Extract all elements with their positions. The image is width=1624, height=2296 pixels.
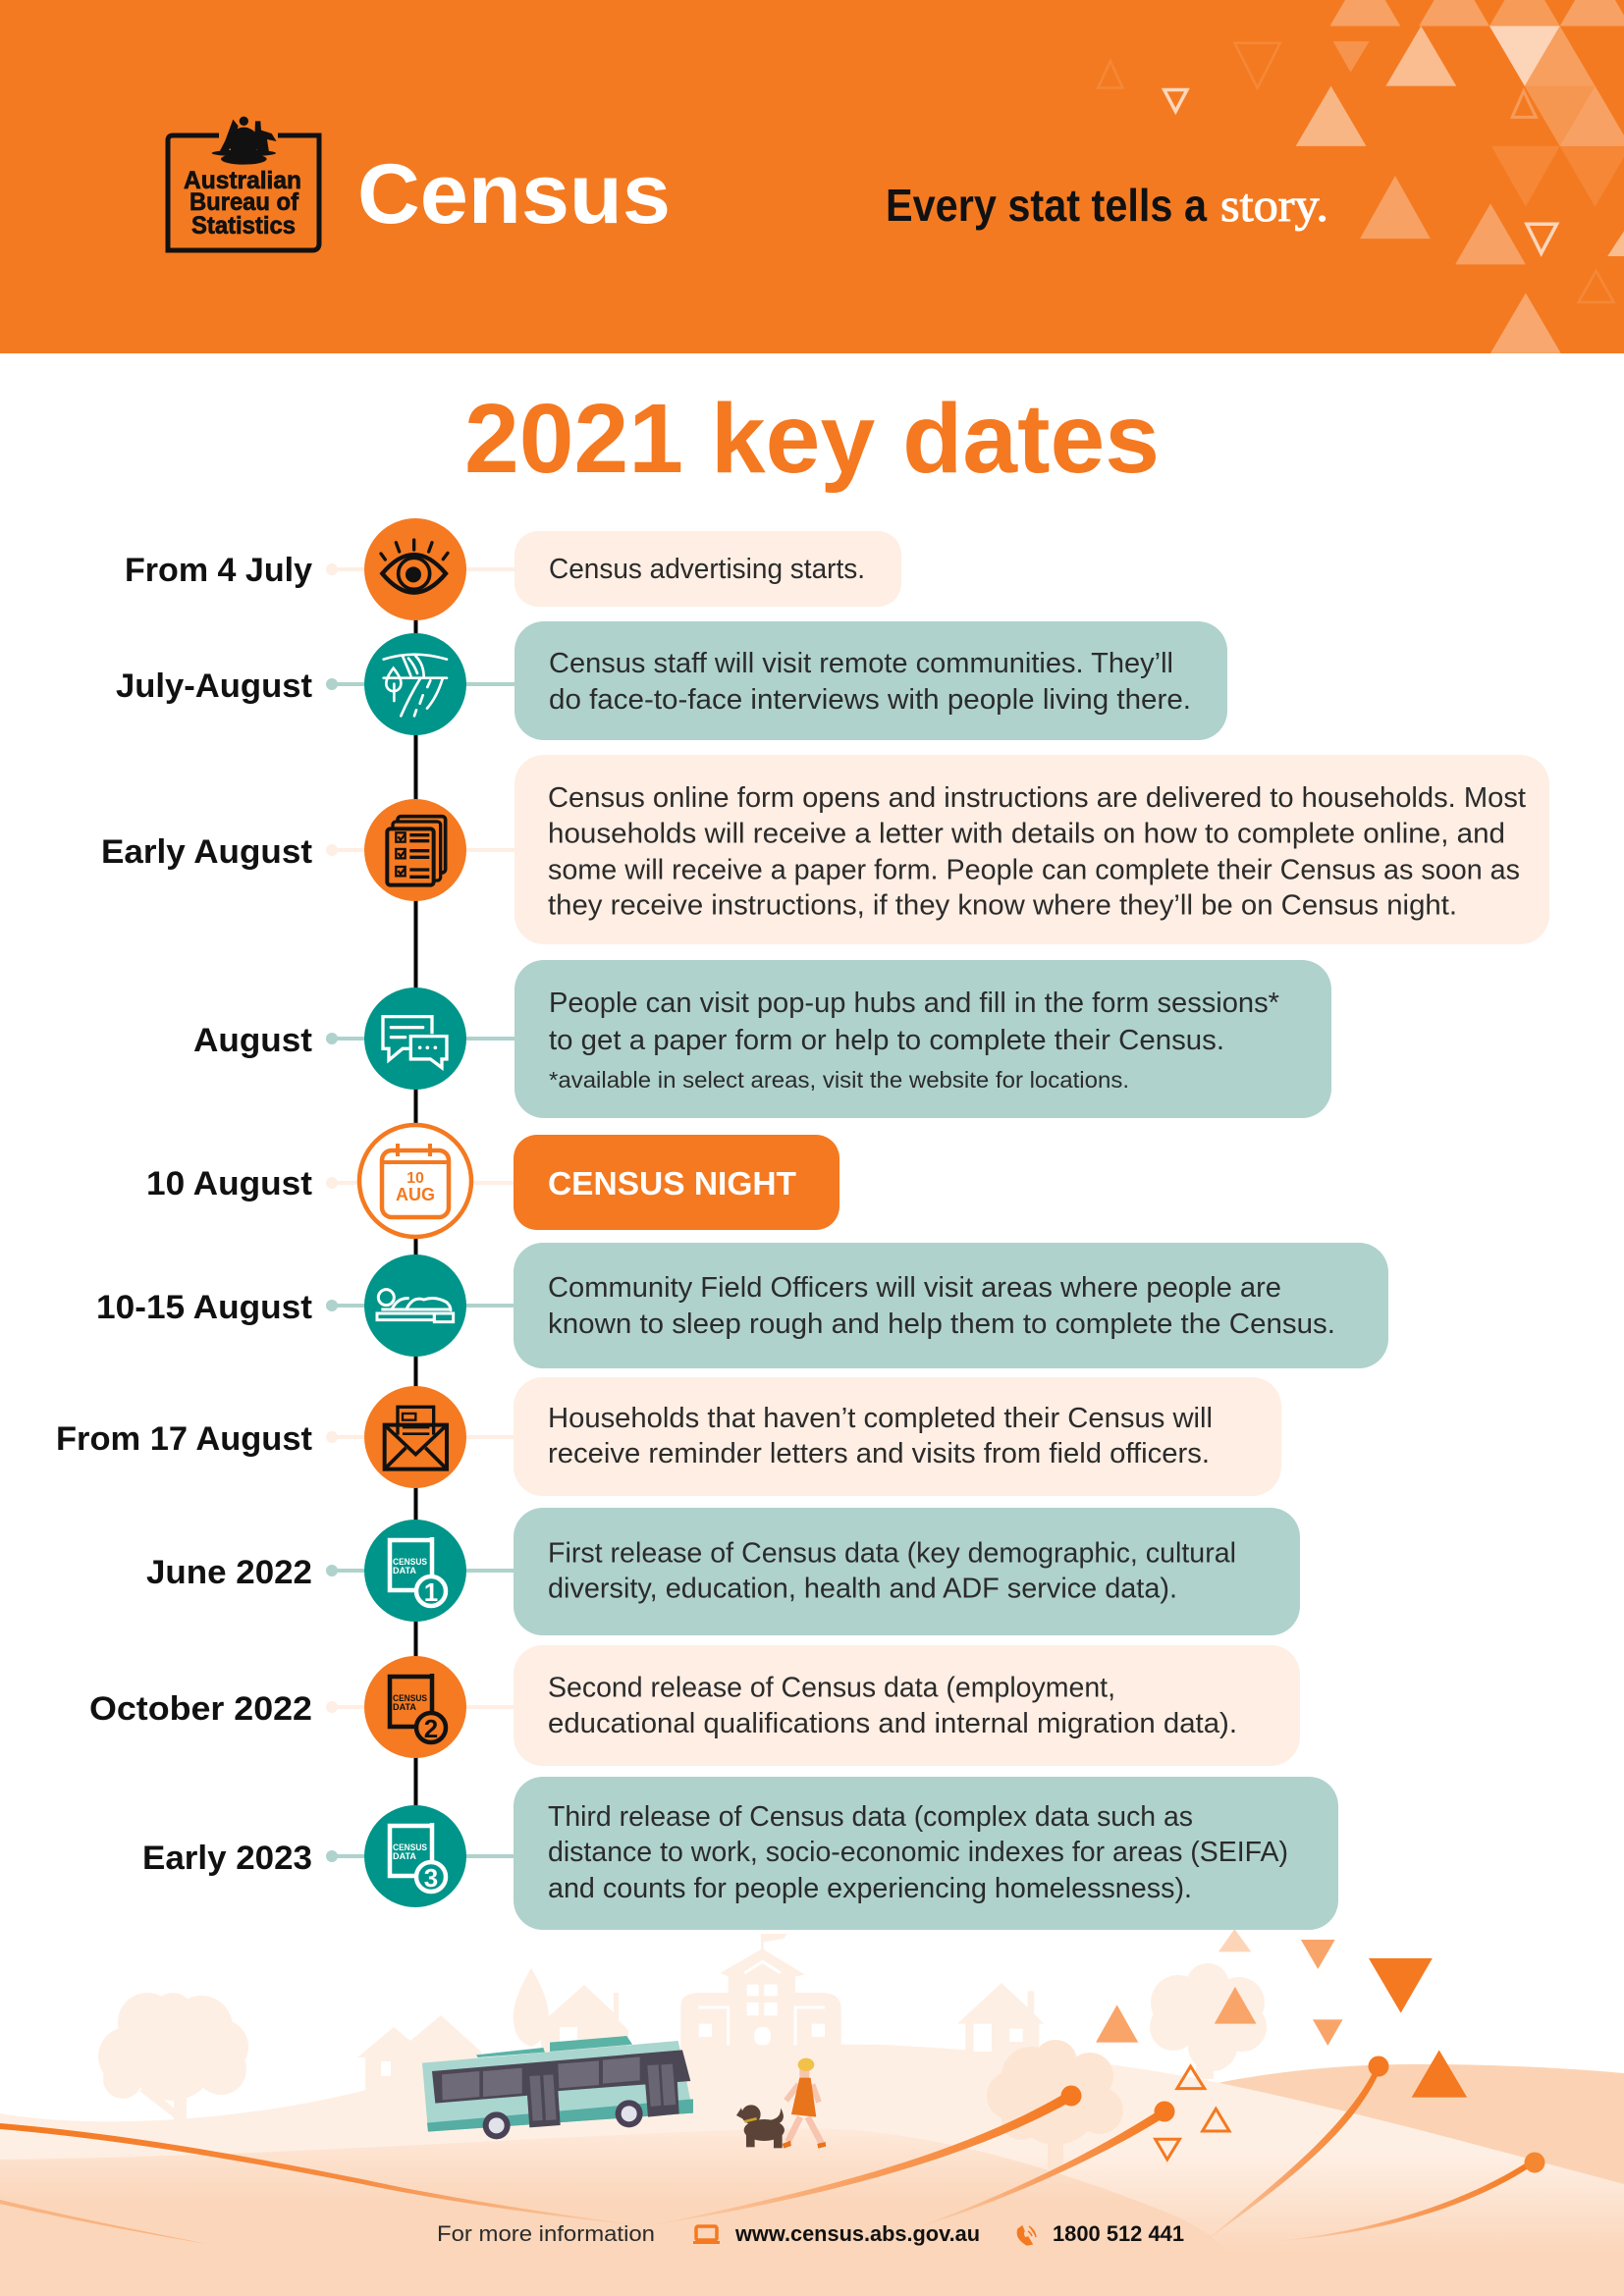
- date: 10-15 August: [96, 1289, 312, 1326]
- date: Early August: [101, 833, 312, 871]
- text bubble: [514, 1243, 1388, 1368]
- school: [680, 1934, 841, 2055]
- ABS logo: [168, 117, 319, 250]
- timeline row: From 17 August: [56, 1377, 1281, 1496]
- timeline row: July-August: [116, 621, 1227, 740]
- ABS logo: Bureau of: [189, 188, 299, 216]
- date: October 2022: [89, 1690, 312, 1728]
- text bubble: receive reminder letters and visits from field officers.: [548, 1438, 1210, 1469]
- footer triangles: [1096, 1929, 1467, 2160]
- curve to node 4: [1278, 2152, 1545, 2241]
- text bubble: they receive instructions, if they know where they’ll be on Census night.: [548, 889, 1457, 921]
- house right: [957, 1983, 1044, 2055]
- curve to node 2: [915, 2101, 1174, 2228]
- text bubble: People can visit pop-up hubs and fill in the form sessions*: [549, 988, 1279, 1019]
- icon: laptop: [693, 2226, 720, 2244]
- text bubble: Census staff will visit remote communities. They’ll: [549, 648, 1173, 679]
- footer landscape: [0, 1929, 1624, 2296]
- icon: census data 3: [364, 1805, 466, 1907]
- ABS logo: Australian: [184, 167, 301, 194]
- Census wordmark: Census: [357, 147, 671, 241]
- icon: census data 1: [364, 1520, 466, 1622]
- girl: [783, 2058, 826, 2149]
- text bubble: and counts for people experiencing homelessness).: [548, 1873, 1192, 1904]
- text bubble: [514, 1377, 1281, 1496]
- text bubble: educational qualifications and internal migration data).: [548, 1708, 1237, 1739]
- title: 2021 key dates: [464, 384, 1160, 494]
- date: From 17 August: [56, 1420, 312, 1458]
- timeline row: October 2022: [89, 1645, 1300, 1766]
- icon: census data 2: CENSUS: [393, 1693, 427, 1704]
- icon: eye: [364, 518, 466, 620]
- far hill: [0, 2045, 1624, 2296]
- text bubble: [514, 1645, 1300, 1766]
- text bubble: Community Field Officers will visit areas where people are: [548, 1272, 1281, 1304]
- text bubble: Census online form opens and instructions are delivered to households. Most: [548, 782, 1526, 814]
- date: August: [193, 1022, 312, 1059]
- tree right: [1150, 1963, 1267, 2079]
- icon: census data 2: DATA: [393, 1702, 416, 1713]
- timeline row: Early 2023: [142, 1777, 1338, 1930]
- date: From 4 July: [125, 552, 312, 589]
- date: Early 2023: [142, 1840, 312, 1877]
- bus: [422, 2036, 693, 2139]
- header triangle pattern: [1098, 0, 1624, 353]
- houses left: [357, 2015, 481, 2101]
- ABS logo: Statistics: [191, 212, 296, 240]
- date: June 2022: [146, 1554, 312, 1591]
- census night bubble: [514, 1135, 839, 1230]
- dog: [736, 2105, 785, 2148]
- mid hill: [0, 2128, 1267, 2296]
- timeline row: August: [193, 960, 1331, 1118]
- curve to node 3: [1206, 2056, 1388, 2241]
- text bubble: some will receive a paper form. People can complete their Census as soon as: [548, 854, 1520, 885]
- footer contact line: For more information: [437, 2221, 655, 2246]
- coat of arms: [212, 117, 277, 165]
- tagline: story.: [1220, 180, 1328, 232]
- curve to node 1: [647, 2085, 1082, 2226]
- tree centre: [987, 2040, 1123, 2171]
- footer contact line: 1800 512 441: [1053, 2221, 1184, 2246]
- timeline row: From 4 July: [125, 518, 901, 620]
- icon: census data 1: CENSUS: [393, 1557, 427, 1568]
- icon: census data 2: 2: [424, 1714, 438, 1743]
- icon: phone: [1017, 2226, 1036, 2245]
- census night bubble: CENSUS NIGHT: [548, 1165, 796, 1201]
- tagline: Every stat tells a: [886, 180, 1207, 231]
- icon: census data 3: CENSUS: [393, 1842, 427, 1853]
- date: 10 August: [146, 1165, 312, 1202]
- text bubble: [514, 755, 1549, 944]
- text bubble: distance to work, socio-economic indexes for areas (SEIFA): [548, 1837, 1288, 1868]
- timeline spine: [414, 609, 418, 1816]
- timeline row: 10 August: [146, 1125, 839, 1237]
- timeline row: Early August: [101, 755, 1549, 944]
- text bubble: do face-to-face interviews with people living there.: [549, 684, 1191, 716]
- icon: road: [364, 633, 466, 735]
- icon: census data 1: 1: [424, 1577, 438, 1607]
- curve left: [0, 2123, 647, 2226]
- tree left: [98, 1993, 248, 2122]
- text bubble: [514, 621, 1227, 740]
- text bubble: [514, 1508, 1300, 1635]
- text bubble: to get a paper form or help to complete their Census.: [549, 1025, 1224, 1056]
- text bubble: *available in select areas, visit the website for locations.: [549, 1067, 1129, 1093]
- text bubble: [514, 960, 1331, 1118]
- icon: envelope: [364, 1386, 466, 1488]
- icon: calendar: 10: [406, 1170, 424, 1187]
- timeline row: 10-15 August: [96, 1243, 1388, 1368]
- icon: chat: [364, 988, 466, 1090]
- footer contact line: www.census.abs.gov.au: [734, 2221, 980, 2246]
- text bubble: First release of Census data (key demographic, cultural: [548, 1537, 1236, 1569]
- icon: census data 3: DATA: [393, 1851, 416, 1862]
- icon: sleeper: [364, 1255, 466, 1357]
- icon: forms: [364, 799, 466, 901]
- header banner: [0, 0, 1624, 353]
- text bubble: Second release of Census data (employment,: [548, 1673, 1115, 1704]
- icon: calendar: [359, 1125, 471, 1237]
- curve left lower: [0, 2200, 207, 2244]
- icon: census data 2: [364, 1656, 466, 1758]
- text bubble: Households that haven’t completed their Census will: [548, 1403, 1213, 1434]
- text bubble: Third release of Census data (complex data such as: [548, 1801, 1193, 1833]
- text bubble: [514, 531, 901, 607]
- icon: census data 1: DATA: [393, 1566, 416, 1576]
- text bubble: Census advertising starts.: [549, 554, 865, 585]
- footer contact line: [437, 2221, 1184, 2246]
- right hill: [1203, 2064, 1624, 2218]
- text bubble: households will receive a letter with details on how to complete online, and: [548, 819, 1505, 850]
- text bubble: [514, 1777, 1338, 1930]
- icon: census data 3: 3: [424, 1863, 438, 1893]
- date: July-August: [116, 667, 312, 705]
- icon: calendar: AUG: [396, 1185, 435, 1204]
- text bubble: diversity, education, health and ADF service data).: [548, 1573, 1177, 1604]
- timeline row: June 2022: [146, 1508, 1300, 1635]
- tall tree and house: [514, 1968, 628, 2061]
- text bubble: known to sleep rough and help them to complete the Census.: [548, 1308, 1335, 1340]
